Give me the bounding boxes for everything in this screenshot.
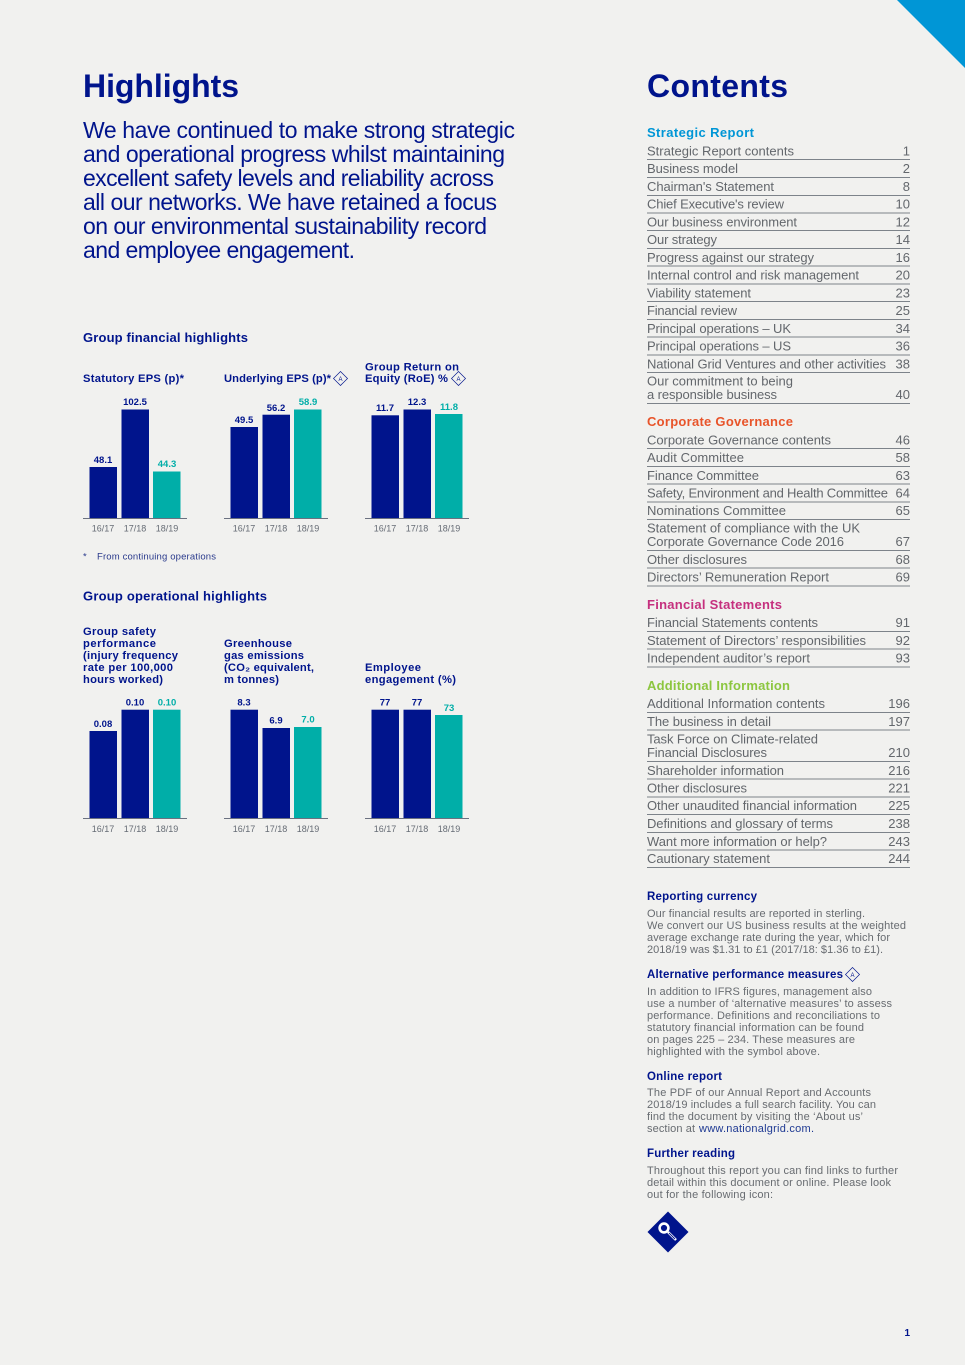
chart: Group safety performance: 0.10 <box>158 698 176 708</box>
chart: Group safety performance: Group safety <box>83 626 157 638</box>
icon: magnifier in diamond <box>648 1212 688 1252</box>
contents: Strategic Report: Strategic Report <box>647 125 755 140</box>
contents: Strategic Report: 20 <box>896 268 910 282</box>
title: Contents: Contents <box>647 68 788 104</box>
chart: Group safety performance: (injury frequency <box>83 650 179 662</box>
text block: Alternative performance measures: highlighted with the symbol above. <box>647 1046 820 1058</box>
contents: Corporate Governance: 68 <box>896 552 910 567</box>
contents: Financial Statements: 91 <box>896 615 910 630</box>
contents: Strategic Report: Business model <box>647 161 738 176</box>
text block: Alternative performance measures: A <box>850 973 855 979</box>
contents: Financial Statements: Statement of Directors’ responsibilities <box>647 633 866 648</box>
contents: Strategic Report: Strategic Report contents <box>647 144 794 158</box>
text block: Alternative performance measures: use a number of ‘alternative measures’ to assess <box>647 998 892 1010</box>
contents: Strategic Report: Viability statement <box>647 286 751 300</box>
text block: Alternative performance measures <box>647 968 892 1058</box>
chart: Employee engagement: 77 <box>412 698 422 708</box>
chart: Group safety performance: rate per 100,000 <box>83 662 173 674</box>
contents: Strategic Report: 16 <box>896 250 910 265</box>
text block: Reporting currency: We convert our US business results at the weighted <box>647 920 906 932</box>
contents: Additional Information: 244 <box>888 851 910 866</box>
contents: Additional Information: Additional Information <box>647 678 790 693</box>
text block: Online report: www.nationalgrid.com. <box>698 1123 814 1135</box>
contents: Financial Statements: Financial Statements <box>647 597 782 612</box>
text block: Further reading: detail within this document or online. Please look <box>647 1177 892 1189</box>
chart: Group Return on Equity: 18/19 <box>438 524 460 534</box>
chart: Underlying EPS: 49.5 <box>235 415 254 426</box>
contents: Strategic Report <box>647 125 910 404</box>
contents: Additional Information: Additional Information contents <box>647 696 826 711</box>
contents: Strategic Report: Financial review <box>647 303 738 318</box>
chart: Employee engagement: 77 <box>380 698 390 708</box>
heading: Group operational highlights: Group operational highlights <box>83 588 267 604</box>
text block: Online report: The PDF of our Annual Report and Accounts <box>647 1087 872 1099</box>
chart: Statutory EPS <box>83 373 187 534</box>
chart: Group safety performance: 17/18 <box>124 824 146 834</box>
contents: Strategic Report: Our strategy <box>647 232 718 247</box>
contents: Strategic Report: National Grid Ventures and other activities <box>647 356 886 372</box>
text block: Reporting currency <box>647 891 906 956</box>
text block: Alternative performance measures: performance. Definitions and reconciliations to <box>647 1010 880 1022</box>
contents: Additional Information: 238 <box>888 816 910 831</box>
text block: Alternative performance measures: Alternative performance measures <box>647 969 843 981</box>
text block: Online report: 2018/19 includes a full search facility. You can <box>647 1099 876 1111</box>
contents: Corporate Governance: Statement of compliance with the UK <box>647 520 860 536</box>
chart: Greenhouse gas emissions: 8.3 <box>237 698 251 708</box>
chart: Group Return on Equity: 12.3 <box>408 397 426 408</box>
chart: Greenhouse gas emissions: gas emissions <box>224 650 304 662</box>
contents: Strategic Report: Principal operations – UK <box>647 321 791 336</box>
contents: Strategic Report: Progress against our strategy <box>647 250 814 265</box>
contents: Strategic Report: 25 <box>896 303 910 318</box>
chart: Statutory EPS: 48.1 <box>94 455 113 466</box>
contents: Additional Information: The business in detail <box>647 714 771 729</box>
chart: Group Return on Equity: 11.7 <box>376 403 394 414</box>
contents: Corporate Governance: Nominations Committee <box>647 503 786 518</box>
contents: Strategic Report: 40 <box>896 387 910 402</box>
contents: Additional Information: 221 <box>888 780 910 796</box>
heading: Group financial highlights: Group financial highlights <box>83 330 248 345</box>
chart: Greenhouse gas emissions <box>224 638 328 834</box>
contents: Financial Statements <box>647 597 910 667</box>
chart: Employee engagement: 18/19 <box>438 824 460 834</box>
chart: Greenhouse gas emissions: 17/18 <box>265 824 287 834</box>
contents: Corporate Governance: Corporate Governance contents <box>647 432 832 448</box>
chart: Statutory EPS: 16/17 <box>92 524 114 534</box>
footnote: * <box>83 552 87 562</box>
contents: Strategic Report: 2 <box>903 161 910 176</box>
chart: Underlying EPS: 17/18 <box>265 524 287 534</box>
contents: Additional Information: Financial Disclosures <box>647 745 768 760</box>
contents: Corporate Governance: Other disclosures <box>647 552 748 567</box>
contents: Corporate Governance: Corporate Governance Code 2016 <box>647 534 844 549</box>
contents: Strategic Report: Chairman's Statement <box>647 179 774 194</box>
contents: Additional Information: Shareholder information <box>647 763 784 778</box>
contents: Additional Information: 216 <box>888 763 910 778</box>
contents: Strategic Report: a responsible business <box>647 387 778 402</box>
contents: Additional Information: Other disclosures <box>647 780 748 796</box>
chart: Greenhouse gas emissions: m tonnes) <box>224 674 279 686</box>
contents: Additional Information: Definitions and glossary of terms <box>647 816 834 831</box>
chart: Employee engagement <box>365 662 469 834</box>
chart: Underlying EPS: A <box>338 377 343 383</box>
chart: Underlying EPS: Underlying EPS (p)* <box>224 373 332 385</box>
chart: Group Return on Equity: 17/18 <box>406 524 428 534</box>
contents: Corporate Governance: 67 <box>896 534 910 549</box>
chart: Underlying EPS: 18/19 <box>297 524 319 534</box>
text block: Online report <box>647 1071 876 1135</box>
contents: Strategic Report: Chief Executive's review <box>647 196 785 212</box>
contents: Additional Information: Task Force on Climate-related <box>647 732 818 746</box>
contents: Corporate Governance: 46 <box>896 432 910 448</box>
intro text: and operational progress whilst maintaining <box>83 141 505 167</box>
contents: Strategic Report: Principal operations – US <box>647 338 791 354</box>
contents: Corporate Governance: 58 <box>896 450 910 465</box>
intro text <box>83 117 515 263</box>
contents: Corporate Governance: 64 <box>896 486 910 500</box>
chart: Statutory EPS: Statutory EPS (p)* <box>83 373 185 385</box>
text block: Online report: Online report <box>647 1071 722 1083</box>
contents: Corporate Governance: Audit Committee <box>647 450 744 465</box>
intro text: We have continued to make strong strategic <box>83 117 515 143</box>
contents: Corporate Governance: Finance Committee <box>647 468 759 483</box>
contents: Additional Information: 243 <box>888 834 910 849</box>
contents: Strategic Report: Our commitment to being <box>647 374 793 388</box>
chart: Employee engagement: 73 <box>444 703 454 714</box>
chart: Greenhouse gas emissions: (CO₂ equivalent, <box>224 662 314 674</box>
chart: Group Return on Equity: 11.8 <box>440 402 458 413</box>
chart: Group Return on Equity: 16/17 <box>374 524 396 534</box>
chart: Statutory EPS: 44.3 <box>158 459 176 470</box>
contents: Additional Information: Other unaudited financial information <box>647 798 857 813</box>
contents: Corporate Governance: 69 <box>896 570 910 584</box>
chart: Underlying EPS: 16/17 <box>233 524 255 534</box>
intro text: and employee engagement. <box>83 237 355 263</box>
chart: Group safety performance: hours worked) <box>83 674 163 686</box>
contents: Strategic Report: 34 <box>896 321 910 336</box>
contents: Strategic Report: 1 <box>903 144 910 158</box>
chart: Group Return on Equity: Equity (RoE) % <box>365 373 448 385</box>
text block: Alternative performance measures: on pages 225 – 234. These measures are <box>647 1034 855 1046</box>
text block: Further reading <box>647 1148 898 1201</box>
text block: Further reading: out for the following icon: <box>647 1189 773 1201</box>
contents: Strategic Report: 10 <box>896 196 910 212</box>
contents: Strategic Report: Internal control and risk management <box>647 268 859 282</box>
contents: Financial Statements: Financial Statements contents <box>647 615 818 630</box>
contents: Financial Statements: 93 <box>896 650 910 666</box>
text block: Reporting currency: Our financial results are reported in sterling. <box>647 908 865 920</box>
contents: Corporate Governance: Directors’ Remuneration Report <box>647 570 829 584</box>
chart: Underlying EPS <box>224 372 348 534</box>
text block: Online report: section at <box>647 1123 695 1135</box>
chart: Underlying EPS: 58.9 <box>299 397 317 408</box>
footnote: From continuing operations <box>97 552 216 562</box>
chart: Greenhouse gas emissions: 18/19 <box>297 824 319 834</box>
contents: Strategic Report: 36 <box>896 338 910 354</box>
contents: Strategic Report: 8 <box>903 179 910 194</box>
intro text: on our environmental sustainability record <box>83 213 487 239</box>
contents: Strategic Report: 23 <box>896 286 910 300</box>
contents: Additional Information: 197 <box>888 714 910 729</box>
chart: Employee engagement: engagement (%) <box>365 674 456 686</box>
chart: Group safety performance: 0.10 <box>126 698 144 708</box>
chart: Group Return on Equity: Group Return on <box>365 362 459 374</box>
text block: Reporting currency: 2018/19 was $1.31 to £1 (2017/18: $1.36 to £1). <box>647 944 883 956</box>
chart: Group Return on Equity: A <box>456 377 461 383</box>
chart: Group safety performance: 18/19 <box>156 824 178 834</box>
chart: Group safety performance <box>83 626 187 834</box>
contents: Additional Information: 225 <box>888 798 910 813</box>
text block: Reporting currency: average exchange rate during the year, which for <box>647 932 890 944</box>
contents: Corporate Governance <box>647 414 910 586</box>
contents: Strategic Report: 14 <box>896 232 910 247</box>
contents: Strategic Report: Our business environment <box>647 214 797 230</box>
contents: Financial Statements: 92 <box>896 633 910 648</box>
chart: Group Return on Equity <box>365 362 469 534</box>
text block: Online report: find the document by visiting the ‘About us’ <box>647 1111 863 1123</box>
chart: Employee engagement: Employee <box>365 662 421 674</box>
contents: Corporate Governance: Safety, Environment and Health Committee <box>647 486 888 500</box>
chart: Underlying EPS: 56.2 <box>267 403 285 414</box>
text block: Reporting currency: Reporting currency <box>647 891 758 903</box>
chart: Employee engagement: 17/18 <box>406 824 428 834</box>
contents: Additional Information: Want more information or help? <box>647 834 827 849</box>
contents: Corporate Governance: 63 <box>896 468 910 483</box>
text block: Further reading: Further reading <box>647 1148 735 1160</box>
contents: Additional Information: Cautionary statement <box>647 851 770 866</box>
chart: Statutory EPS: 17/18 <box>124 524 146 534</box>
chart: Statutory EPS: 18/19 <box>156 524 178 534</box>
chart: Group safety performance: 0.08 <box>94 719 112 730</box>
intro text: all our networks. We have retained a focus <box>83 189 497 215</box>
chart: Group safety performance: 16/17 <box>92 824 114 834</box>
chart: Statutory EPS: 102.5 <box>123 397 148 408</box>
chart: Employee engagement: 16/17 <box>374 824 396 834</box>
contents: Additional Information: 210 <box>888 745 910 760</box>
contents: Strategic Report: 38 <box>896 356 910 372</box>
contents: Corporate Governance: Corporate Governance <box>647 414 793 429</box>
text block: Further reading: Throughout this report you can find links to further <box>647 1165 898 1177</box>
icon: corner triangle <box>897 0 965 68</box>
chart: Greenhouse gas emissions: Greenhouse <box>224 638 292 650</box>
contents: Strategic Report: 12 <box>896 214 910 230</box>
chart: Greenhouse gas emissions: 16/17 <box>233 824 255 834</box>
text block: Alternative performance measures: In addition to IFRS figures, management also <box>647 986 872 998</box>
title: Highlights: Highlights <box>83 68 239 104</box>
chart: Greenhouse gas emissions: 7.0 <box>301 714 315 726</box>
contents: Additional Information: 196 <box>888 696 910 711</box>
intro text: excellent safety levels and reliability across <box>83 165 494 191</box>
chart: Group safety performance: performance <box>83 638 156 650</box>
text block: Alternative performance measures: statutory financial information can be found <box>647 1022 864 1034</box>
contents: Financial Statements: Independent auditor’s report <box>647 650 810 666</box>
chart: Greenhouse gas emissions: 6.9 <box>269 716 283 726</box>
page number: 1 <box>904 1328 910 1339</box>
contents: Corporate Governance: 65 <box>896 503 910 518</box>
contents: Additional Information <box>647 678 910 868</box>
